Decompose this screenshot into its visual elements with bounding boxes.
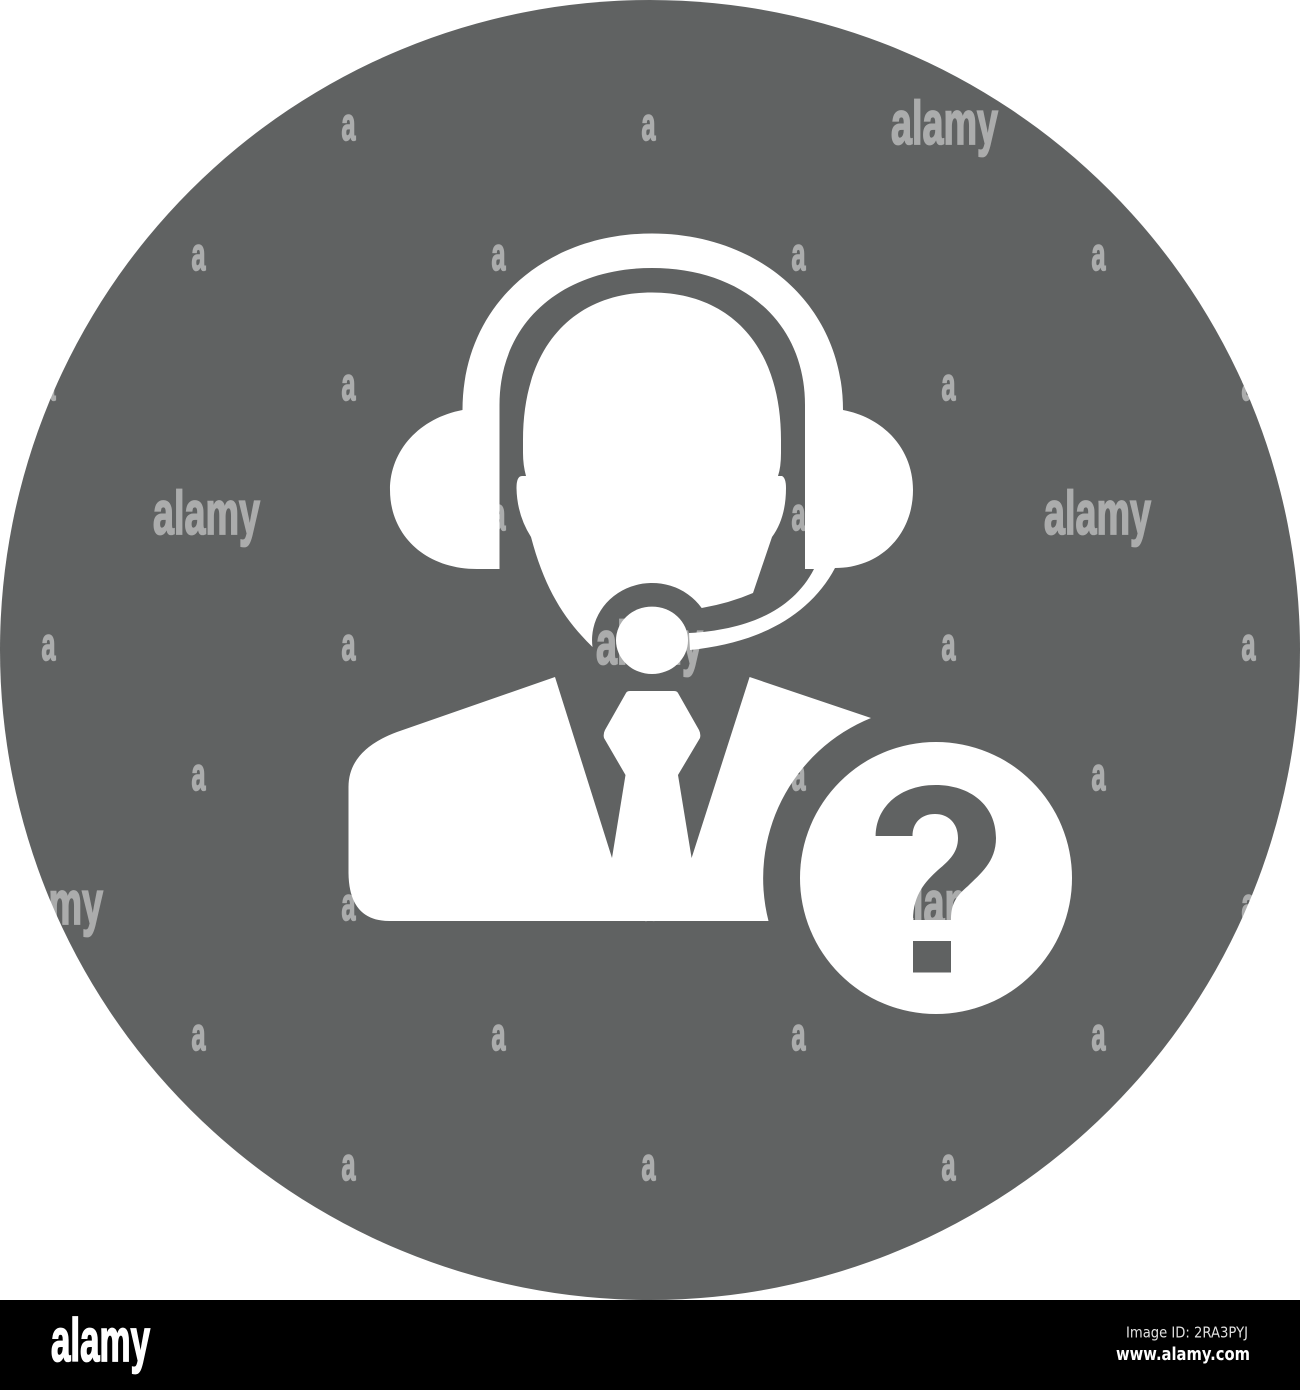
watermark pattern: a [642, 878, 656, 930]
watermark pattern: a [1092, 228, 1106, 280]
watermark pattern: a [192, 748, 206, 800]
watermark pattern: a [492, 228, 506, 280]
footer bar [0, 1300, 1300, 1390]
watermark pattern: a [42, 358, 56, 410]
watermark pattern: a [1092, 1008, 1106, 1060]
watermark pattern: a [342, 878, 356, 930]
watermark pattern: a [1242, 878, 1256, 930]
watermark pattern: a [492, 1008, 506, 1060]
watermark pattern: a [342, 98, 356, 150]
watermark pattern: alamy [1044, 479, 1151, 547]
watermark pattern: alamy [596, 609, 703, 677]
watermark pattern: a [792, 488, 806, 540]
icon: agent suit and tie [348, 677, 871, 921]
watermark pattern: a [1242, 358, 1256, 410]
watermark pattern: a [792, 748, 806, 800]
watermark pattern: a [942, 618, 956, 670]
website: www.alamy.com [1116, 1345, 1250, 1365]
watermark pattern: a [942, 358, 956, 410]
watermark pattern: a [792, 1008, 806, 1060]
watermark pattern: a [1242, 618, 1256, 670]
watermark pattern: a [642, 98, 656, 150]
icon: question mark badge [800, 742, 1072, 1014]
watermark pattern: a [642, 1138, 656, 1190]
watermark pattern [0, 89, 1256, 1190]
watermark pattern: a [342, 358, 356, 410]
watermark pattern: alamy [891, 89, 998, 157]
watermark pattern: a [1092, 748, 1106, 800]
watermark pattern: a [342, 1138, 356, 1190]
watermark pattern: alamy [892, 869, 999, 937]
watermark pattern: a [492, 488, 506, 540]
icon: headset with earmuffs and mic arm [390, 234, 913, 674]
watermark pattern: a [342, 618, 356, 670]
watermark pattern: a [192, 228, 206, 280]
watermark pattern: a [942, 1138, 956, 1190]
watermark pattern: alamy [153, 479, 260, 547]
watermark pattern: a [192, 1008, 206, 1060]
footer logo: alamy [51, 1307, 150, 1374]
watermark pattern: a [792, 228, 806, 280]
image id: Image ID: 2RA3PYJ [1126, 1324, 1248, 1342]
watermark pattern: a [42, 618, 56, 670]
watermark pattern: alamy [0, 869, 103, 937]
icon: agent head [516, 292, 786, 647]
